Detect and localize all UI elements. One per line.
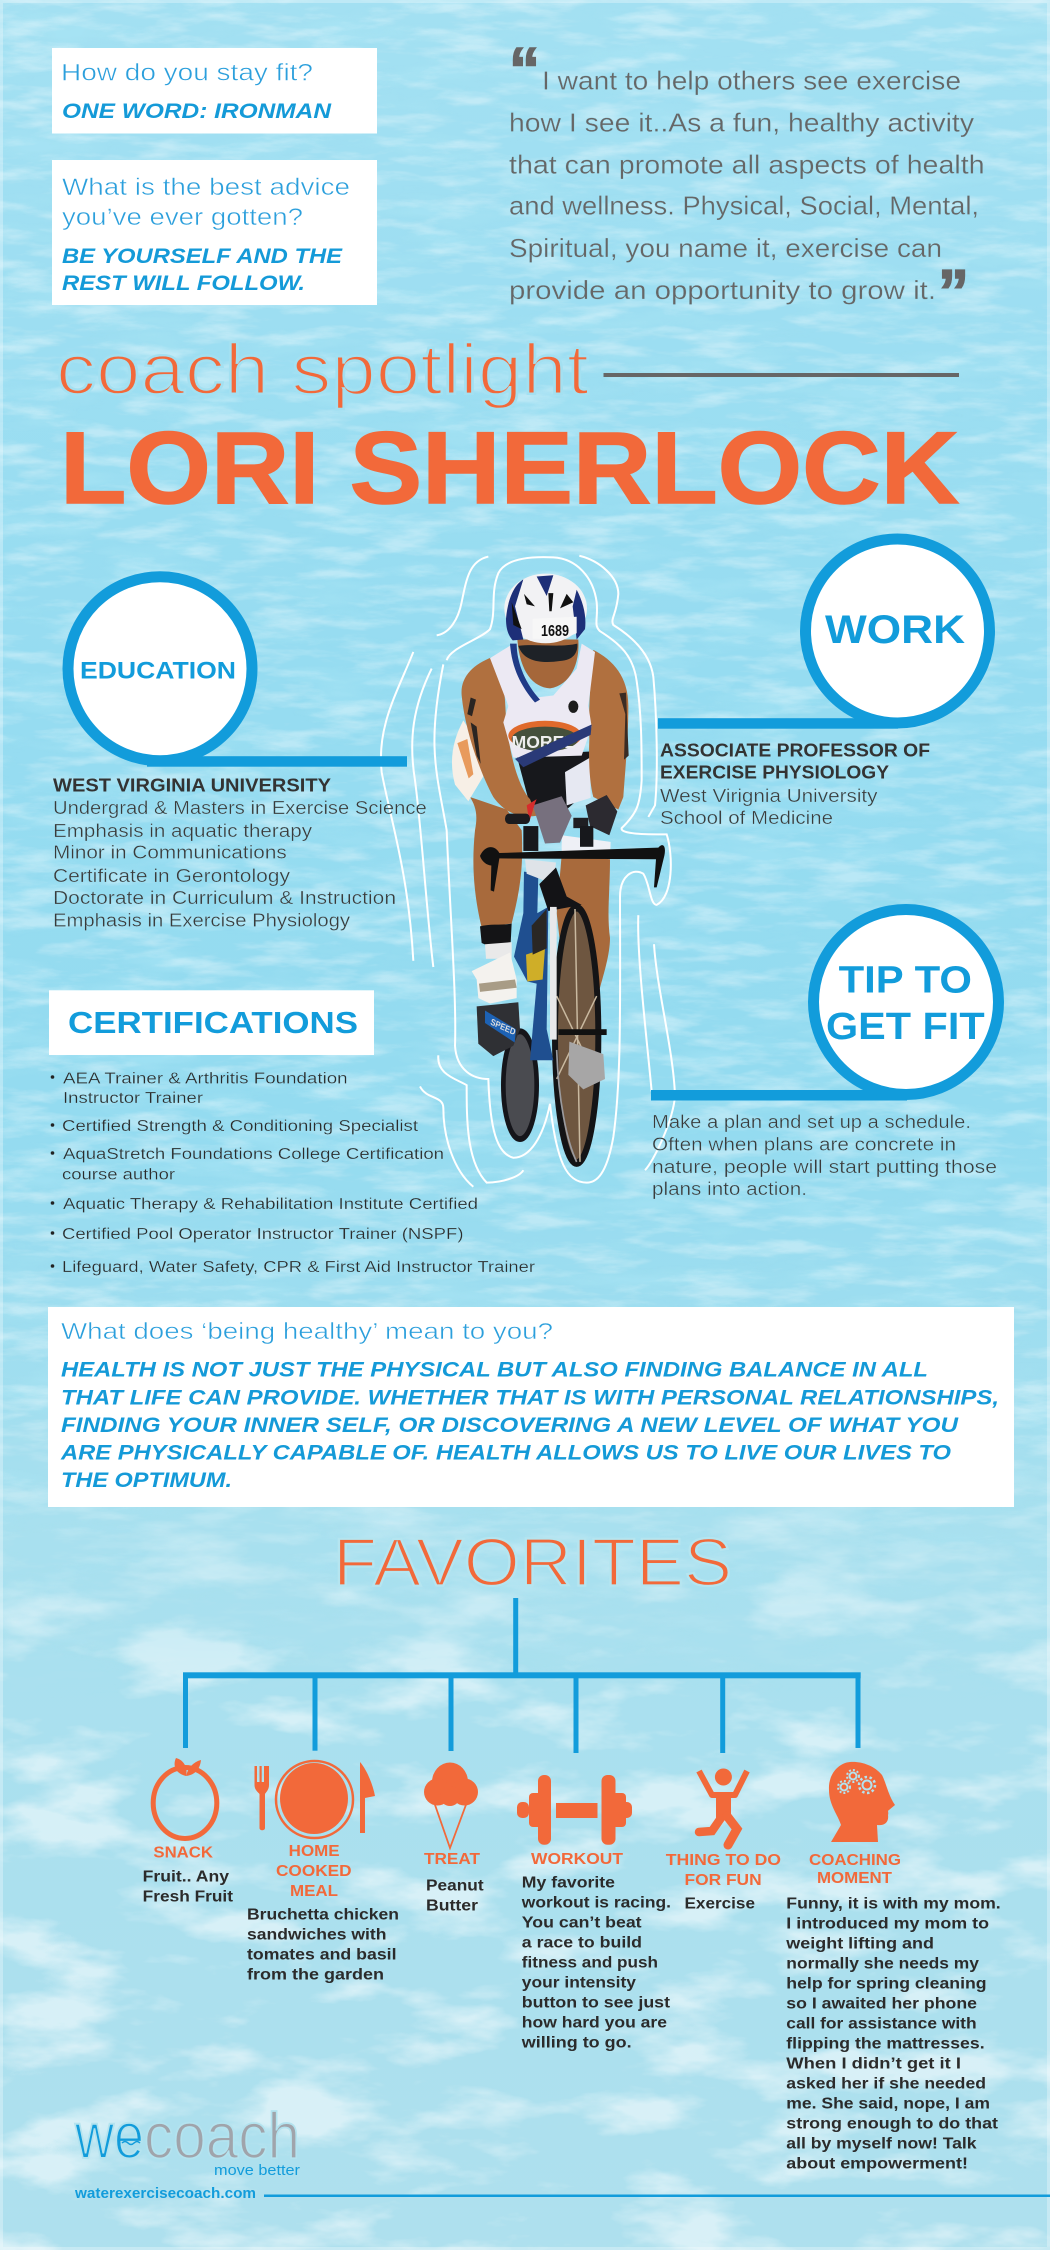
panel: being healthy: HEALTH IS NOT JUST THE PHYSICAL BUT ALSO FINDING BALANCE IN ALL: [61, 1359, 928, 1382]
favorite: thing to do for fun: THING TO DO: [666, 1852, 781, 1869]
favorite: home cooked meal: sandwiches with: [247, 1927, 386, 1944]
tip text: [652, 1112, 997, 1199]
heading: favorites: FAVORITES: [333, 1525, 732, 1601]
head and helmet: [504, 574, 587, 703]
work text: [660, 741, 930, 828]
icon: plate and cutlery (meal): [254, 1761, 375, 1838]
favorite: treat: Butter: [426, 1898, 478, 1915]
panel: work: WORK: [825, 608, 965, 652]
favorite: snack: SNACK: [153, 1845, 213, 1862]
favorite: coaching moment: normally she needs my: [786, 1956, 979, 1973]
panel: being healthy: THE OPTIMUM.: [61, 1469, 232, 1492]
tip text: Often when plans are concrete in: [652, 1134, 956, 1154]
favorite: home cooked meal: [247, 1843, 399, 1984]
favorite: treat: [424, 1851, 484, 1915]
favorite: workout: You can’t beat: [522, 1915, 642, 1932]
panel: best advice: you’ve ever gotten?: [62, 204, 303, 231]
favorite: coaching moment: call for assistance with: [786, 2016, 977, 2033]
certifications list: course author: [62, 1166, 175, 1183]
work text: EXERCISE PHYSIOLOGY: [660, 763, 889, 783]
icon: jumping figure (fun): [699, 1768, 747, 1845]
bicycle frame: SPEED: [489, 1017, 517, 1037]
legs: [470, 797, 610, 1017]
panel: being healthy: What does ‘being healthy’ mean to you?: [61, 1318, 553, 1344]
certifications list: AquaStretch Foundations College Certification: [63, 1146, 444, 1163]
education text: Emphasis in aquatic therapy: [53, 821, 312, 841]
favorite: workout: a race to build: [522, 1935, 642, 1952]
panel: being healthy: ARE PHYSICALLY CAPABLE OF. HEALTH ALLOWS US TO LIVE OUR LIVES TO: [60, 1442, 951, 1465]
panel: best advice: [52, 160, 377, 305]
panel: best advice: REST WILL FOLLOW.: [62, 272, 305, 295]
title: Lori Sherlock: LORI SHERLOCK: [60, 411, 959, 525]
front wheel: [555, 908, 607, 1163]
panel: being healthy: THAT LIFE CAN PROVIDE. WHETHER THAT IS WITH PERSONAL RELATIONSHIPS,: [61, 1387, 999, 1410]
title: coach spotlight: coach spotlight: [56, 331, 589, 410]
logo: wecoach: coach: [144, 2099, 300, 2172]
certifications list: Certified Strength & Conditioning Specialist: [62, 1118, 419, 1135]
certifications list: Aquatic Therapy & Rehabilitation Institute Certified: [63, 1196, 478, 1213]
favorite: coaching moment: help for spring cleaning: [786, 1976, 987, 1993]
head and helmet: 1689: [541, 623, 569, 641]
favorite: home cooked meal: HOME: [289, 1843, 340, 1860]
favorite: home cooked meal: from the garden: [247, 1967, 384, 1984]
quote: how I see it..As a fun, healthy activity: [509, 108, 974, 138]
work text: West Virignia University: [660, 786, 878, 806]
favorite: thing to do for fun: Exercise: [684, 1896, 755, 1913]
favorite: workout: [521, 1851, 671, 2052]
favorite: coaching moment: MOMENT: [817, 1870, 892, 1887]
favorites connector tree: [183, 1598, 861, 1753]
left foot: [472, 923, 517, 1004]
favorite: snack: Fruit.. Any: [143, 1869, 229, 1886]
favorite: treat: Peanut: [426, 1878, 484, 1895]
favorite: coaching moment: Funny, it is with my mom.: [786, 1896, 1001, 1913]
favorite: coaching moment: I introduced my mom to: [786, 1916, 989, 1933]
panel: how do you stay fit: How do you stay fit?: [61, 60, 313, 86]
shorts: [452, 720, 611, 858]
favorite: coaching moment: weight lifting and: [785, 1936, 934, 1953]
panel: how do you stay fit: [52, 48, 377, 134]
jersey: [490, 644, 595, 767]
panel: best advice: BE YOURSELF AND THE: [62, 245, 343, 268]
favorite: coaching moment: When I didn’t get it I: [786, 2056, 961, 2073]
education text: Certificate in Gerontology: [53, 866, 290, 886]
title: coach spotlight: [56, 331, 959, 410]
logo: wecoach: move better: [214, 2162, 300, 2179]
tip text: plans into action.: [652, 1179, 807, 1199]
panel: being healthy: FINDING YOUR INNER SELF, OR DISCOVERING A NEW LEVEL OF WHAT YOU: [61, 1414, 959, 1437]
tip text: nature, people will start putting those: [652, 1157, 997, 1177]
website footer: waterexercisecoach.com: [74, 2185, 256, 2202]
heading: certifications: [49, 990, 374, 1055]
education text: Emphasis in Exercise Physiology: [53, 911, 350, 931]
certifications list: Instructor Trainer: [63, 1090, 203, 1107]
favorite: thing to do for fun: FOR FUN: [684, 1872, 762, 1889]
certifications list: Lifeguard, Water Safety, CPR & First Aid Instructor Trainer: [62, 1259, 535, 1276]
favorite: coaching moment: [785, 1852, 1001, 2173]
certifications list: [51, 1070, 535, 1276]
favorite: workout: fitness and push: [522, 1955, 658, 1972]
education text: Undergrad & Masters in Exercise Science: [53, 798, 427, 818]
quote: provide an opportunity to grow it.: [509, 275, 936, 305]
favorite: workout: My favorite: [522, 1875, 615, 1892]
icon: ice cream (treat): [424, 1762, 478, 1848]
favorite: home cooked meal: Bruchetta chicken: [247, 1906, 399, 1923]
favorite: treat: TREAT: [424, 1851, 480, 1868]
favorite: home cooked meal: COOKED: [276, 1863, 352, 1880]
quote: [509, 36, 985, 327]
favorite: coaching moment: me. She said, nope, I am: [786, 2096, 990, 2113]
favorite: coaching moment: flipping the mattresses.: [786, 2036, 985, 2053]
rear wheel: [503, 1031, 537, 1139]
favorite: coaching moment: COACHING: [809, 1852, 901, 1869]
arms: [462, 650, 629, 816]
panel: best advice: What is the best advice: [62, 174, 350, 201]
icon: head with gears (coaching): [829, 1762, 895, 1842]
favorite: workout: your intensity: [522, 1975, 636, 1992]
panel: education: EDUCATION: [80, 658, 236, 685]
bicycle frame: [477, 859, 582, 1060]
favorite: thing to do for fun: [666, 1852, 781, 1913]
favorite: coaching moment: strong enough to do that: [786, 2116, 999, 2133]
favorite: snack: [143, 1845, 234, 1906]
panel: education: [68, 577, 407, 767]
favorite: workout: button to see just: [522, 1995, 671, 2012]
favorite: coaching moment: all by myself now! Talk: [786, 2136, 977, 2153]
icon: orange (snack): [153, 1758, 217, 1838]
favorite: workout: workout is racing.: [521, 1895, 671, 1912]
education text: Minor in Communications: [53, 843, 287, 863]
quote: Spiritual, you name it, exercise can: [509, 233, 942, 263]
panel: work: [658, 539, 990, 729]
favorite: coaching moment: about empowerment!: [786, 2156, 968, 2173]
quote: ”: [938, 258, 969, 327]
education text: Doctorate in Curriculum & Instruction: [53, 888, 396, 908]
work text: ASSOCIATE PROFESSOR OF: [660, 741, 930, 761]
favorite: snack: Fresh Fruit: [143, 1889, 234, 1906]
jersey: MOREL: [512, 734, 575, 753]
heading: certifications: CERTIFICATIONS: [68, 1005, 358, 1040]
work text: School of Medicine: [660, 808, 833, 828]
certifications list: Certified Pool Operator Instructor Trainer (NSPF): [62, 1226, 464, 1243]
favorite: workout: WORKOUT: [531, 1851, 623, 1868]
panel: tip to get fit: [651, 910, 998, 1100]
white body outlines: [381, 556, 675, 1187]
favorite: home cooked meal: MEAL: [290, 1883, 338, 1900]
favorite: coaching moment: asked her if she needed: [786, 2076, 986, 2093]
quote: “: [509, 36, 540, 105]
athlete photo illustration: [381, 556, 675, 1187]
education text: WEST VIRGINIA UNIVERSITY: [53, 776, 331, 796]
favorite: workout: willing to go.: [521, 2035, 632, 2052]
gloves and handlebar: [480, 795, 665, 892]
certifications list: AEA Trainer & Arthritis Foundation: [63, 1070, 348, 1087]
logo: wecoach: we: [74, 2099, 144, 2172]
tip text: Make a plan and set up a schedule.: [652, 1112, 971, 1132]
panel: tip to get fit: GET FIT: [826, 1006, 985, 1048]
quote: and wellness. Physical, Social, Mental,: [509, 191, 979, 221]
favorite: workout: how hard you are: [522, 2015, 667, 2032]
logo: wecoach: [74, 2099, 300, 2179]
panel: tip to get fit: TIP TO: [839, 960, 972, 1002]
icon: dumbbell (workout): [517, 1775, 632, 1845]
quote: that can promote all aspects of health: [509, 149, 985, 179]
quote: I want to help others see exercise: [542, 66, 961, 96]
education text: [53, 776, 427, 931]
favorite: home cooked meal: tomates and basil: [247, 1947, 396, 1964]
favorite: coaching moment: so I awaited her phone: [786, 1996, 977, 2013]
panel: how do you stay fit: ONE WORD: IRONMAN: [62, 100, 332, 123]
panel: being healthy: [48, 1307, 1014, 1507]
